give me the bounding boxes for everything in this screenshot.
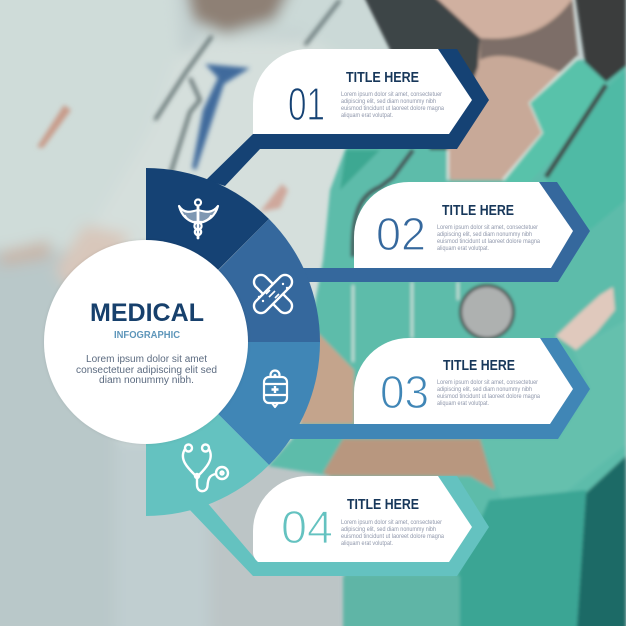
heading: MEDICAL: MEDICAL — [90, 299, 204, 327]
title 03: TITLE HERE — [443, 357, 515, 374]
connector and arrow band 4 — [188, 476, 489, 576]
body text 03: aliquam erat volutpat. — [437, 401, 489, 407]
body text 03: euismod tincidunt ut laoreet dolore magna — [437, 394, 541, 400]
card 04 — [253, 476, 472, 562]
circle description: Lorem ipsum dolor sit amet — [86, 354, 207, 365]
fan segment: teal — [146, 342, 269, 516]
card 01 — [253, 49, 472, 134]
body text 04: euismod tincidunt ut laoreet dolore magna — [341, 534, 445, 540]
nurse — [268, 0, 626, 626]
body text 03 — [437, 380, 541, 407]
body text 03: Lorem ipsum dolor sit amet, consectetuer — [437, 380, 538, 386]
title 02: TITLE HERE — [442, 202, 514, 219]
body text 01 — [341, 92, 445, 119]
number 02: 02 — [376, 208, 426, 260]
title 01: TITLE HERE — [346, 69, 419, 86]
icon: caduceus — [179, 200, 218, 238]
icon: crossed bandages — [251, 272, 295, 316]
number 03: 03 — [380, 366, 429, 418]
body text 02: Lorem ipsum dolor sit amet, consectetuer — [437, 225, 538, 231]
connector and arrow band 2 — [300, 182, 590, 282]
body text 02: adipiscing elit, sed diam nonummy nibh — [437, 232, 532, 238]
connector and arrow band 1 — [206, 49, 489, 186]
connector and arrow band 3 — [288, 338, 590, 439]
circle description: diam nonummy nibh. — [99, 375, 194, 386]
body text 01: euismod tincidunt ut laoreet dolore magna — [341, 106, 445, 112]
number 04: 04 — [281, 501, 333, 553]
circle description: consectetuer adipiscing elit sed — [76, 365, 217, 376]
icon: IV bag — [264, 370, 287, 407]
body text 01: aliquam erat volutpat. — [341, 113, 393, 119]
fan segment: dark navy — [146, 168, 269, 342]
card 03 — [354, 338, 573, 424]
body text 02: euismod tincidunt ut laoreet dolore magna — [437, 239, 541, 245]
body text 04: adipiscing elit, sed diam nonummy nibh — [341, 527, 436, 533]
title 04: TITLE HERE — [347, 496, 419, 513]
icon: stethoscope — [183, 444, 228, 491]
circle description — [76, 354, 217, 386]
center circle with heading — [44, 240, 248, 444]
subheading: INFOGRAPHIC: INFOGRAPHIC — [114, 330, 180, 341]
body text 04: aliquam erat volutpat. — [341, 541, 393, 547]
body text 01: Lorem ipsum dolor sit amet, consectetuer — [341, 92, 442, 98]
body text 03: adipiscing elit, sed diam nonummy nibh — [437, 387, 532, 393]
body text 01: adipiscing elit, sed diam nonummy nibh — [341, 99, 436, 105]
body text 04: Lorem ipsum dolor sit amet, consectetuer — [341, 520, 442, 526]
fan segment: mid blue — [146, 219, 320, 343]
card 02 — [354, 182, 573, 268]
number 01: 01 — [288, 78, 325, 130]
fan segment: light blue — [146, 342, 320, 465]
body text 04 — [341, 520, 445, 547]
body text 02: aliquam erat volutpat. — [437, 246, 489, 252]
body text 02 — [437, 225, 541, 252]
